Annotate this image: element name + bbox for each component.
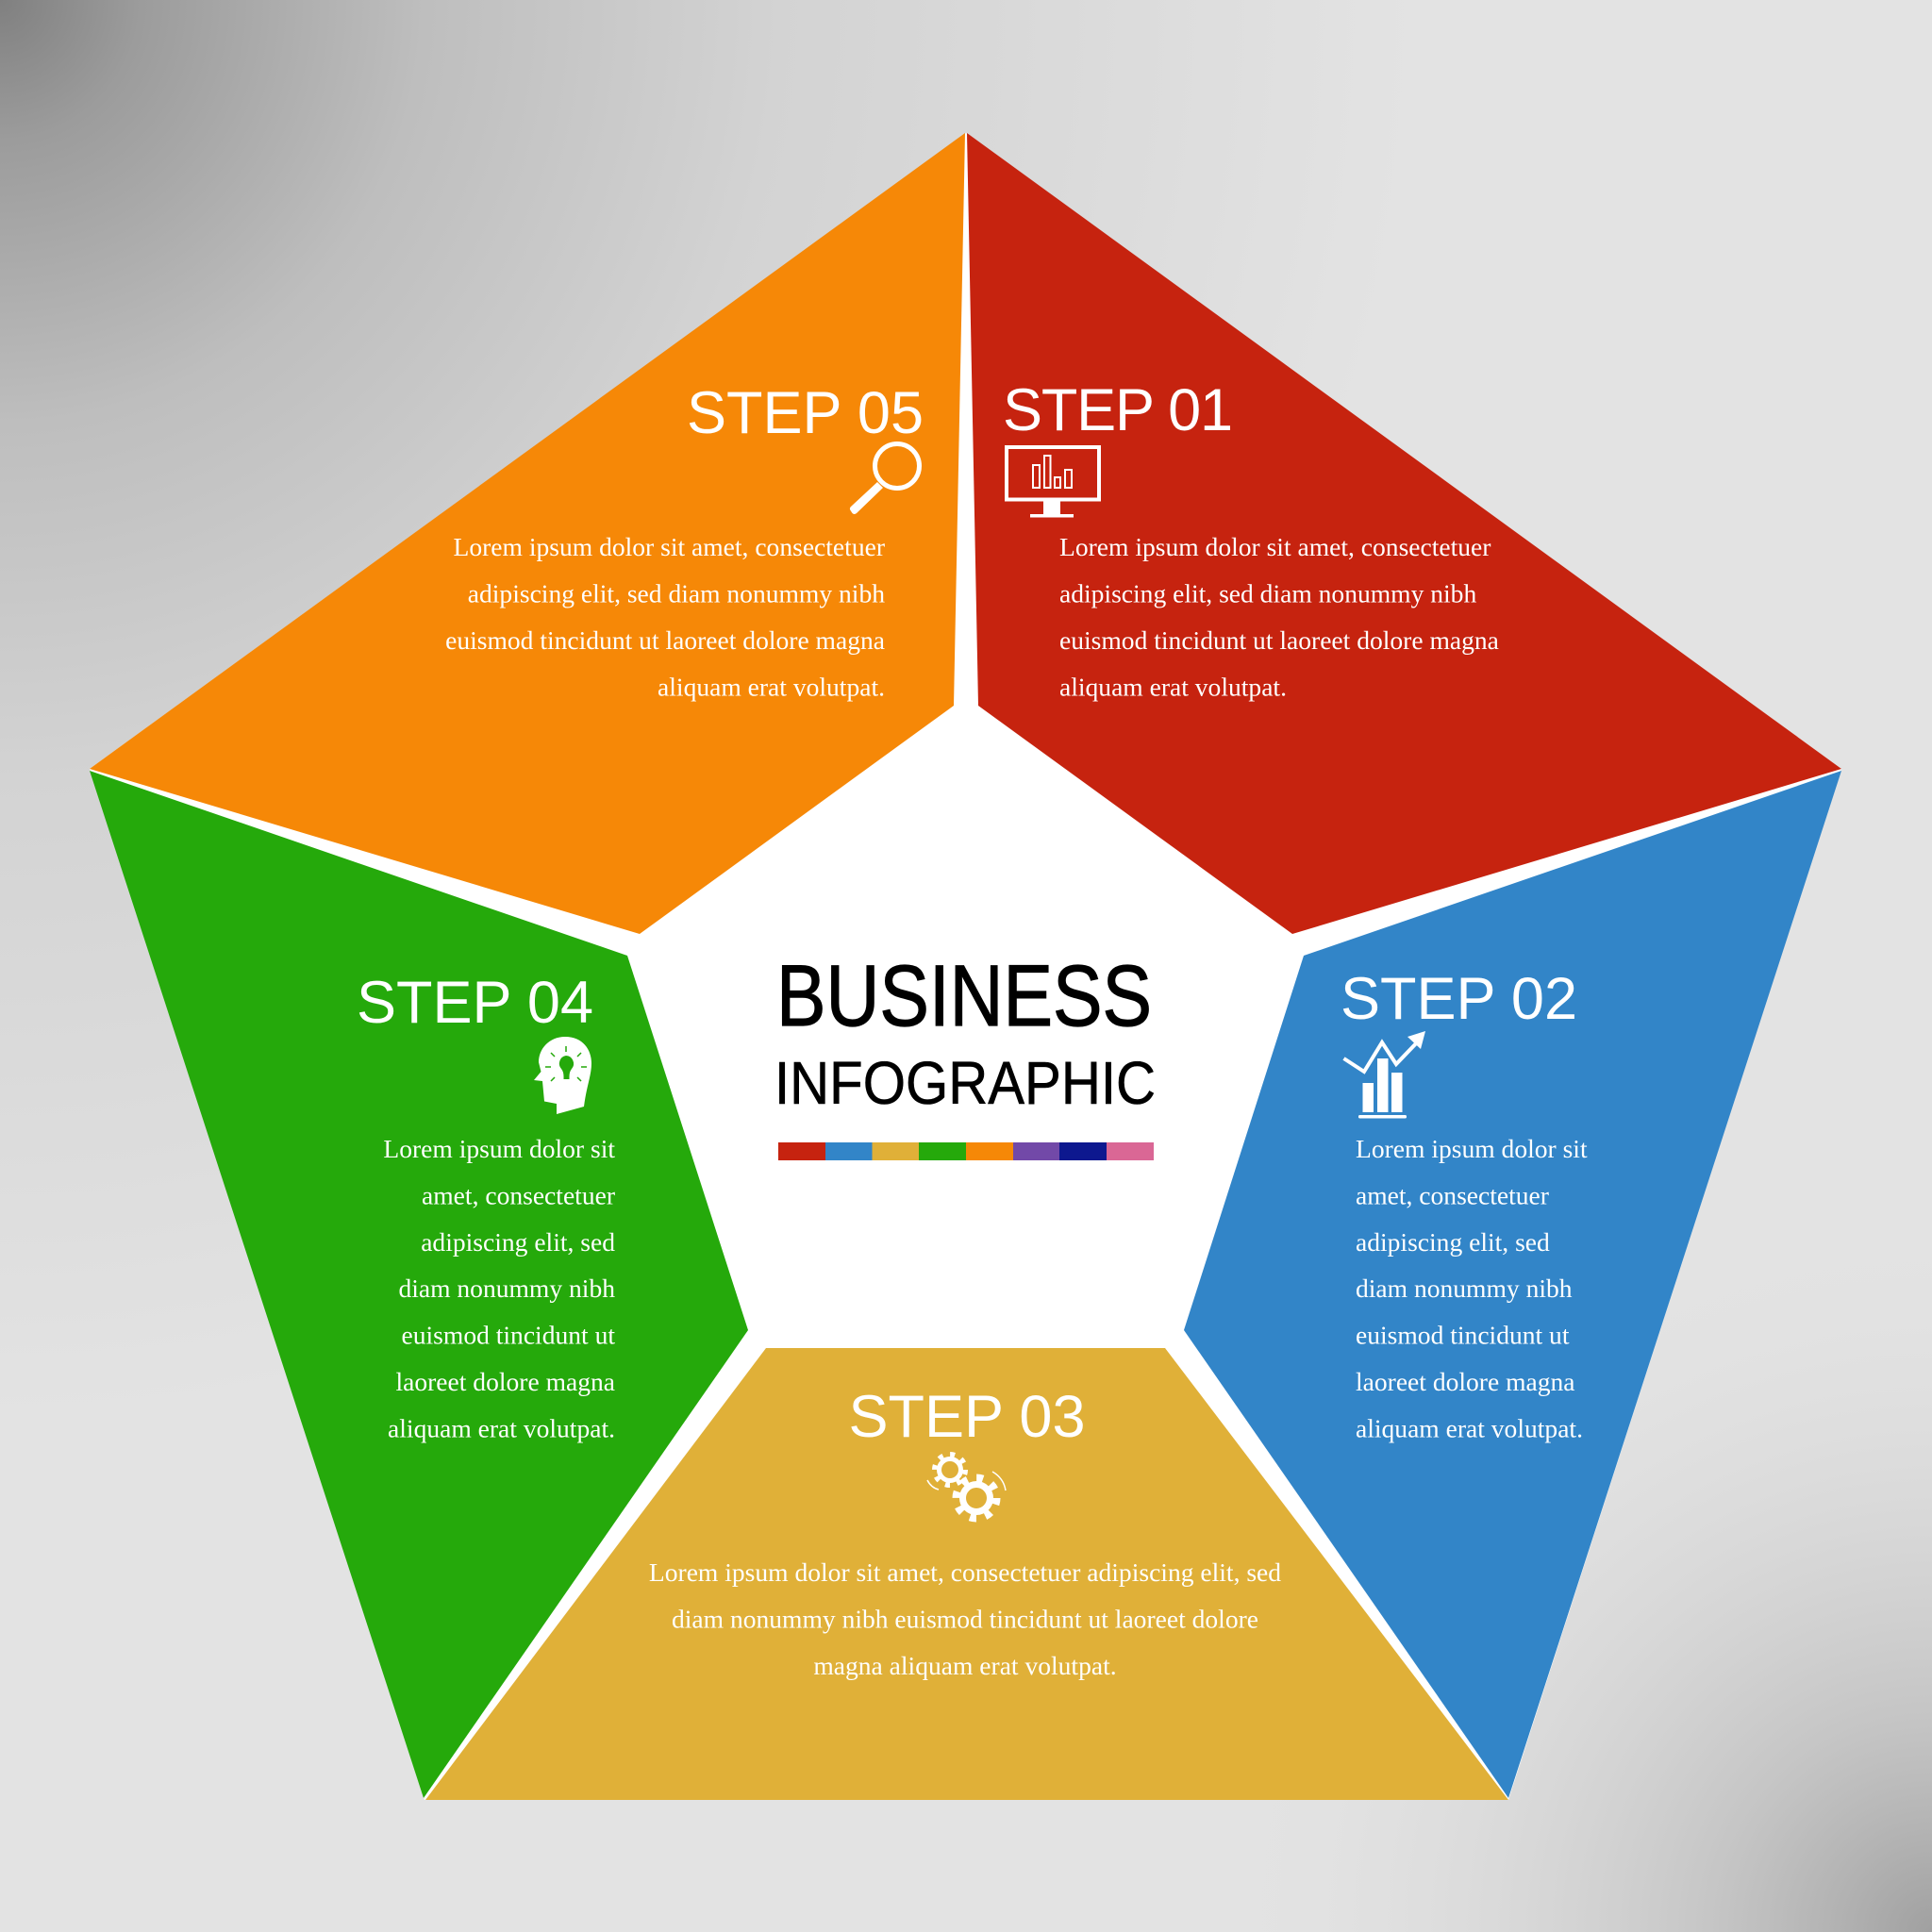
body text: step 01: Lorem ipsum dolor sit amet, consectetuer <box>1059 532 1491 561</box>
body text: step 02: Lorem ipsum dolor sit <box>1356 1134 1588 1163</box>
body text: step 02: euismod tincidunt ut <box>1356 1321 1570 1349</box>
icon: head with light bulb <box>534 1037 591 1114</box>
icon: magnifying glass <box>850 443 919 514</box>
body text: step 04: amet, consectetuer <box>422 1181 615 1209</box>
body text: step 03: Lorem ipsum dolor sit amet, consectetuer adipiscing elit, sed <box>649 1557 1281 1587</box>
green segment <box>90 771 748 1798</box>
body text: step 02: laoreet dolore magna <box>1356 1367 1575 1396</box>
body text: step 02: aliquam erat volutpat. <box>1356 1413 1583 1443</box>
panel: step 05 <box>90 133 965 934</box>
body text: step 02 <box>1356 1134 1588 1443</box>
panel: step 03 <box>425 1348 1508 1800</box>
body text: step 01 <box>1059 532 1499 702</box>
heading: step 02: STEP 02 <box>1341 966 1577 1032</box>
body text: step 04: euismod tincidunt ut <box>402 1321 615 1349</box>
orange segment <box>90 133 965 934</box>
body text: step 05: aliquam erat volutpat. <box>658 672 885 702</box>
blue segment <box>1184 771 1841 1798</box>
body text: step 02: adipiscing elit, sed <box>1356 1227 1550 1257</box>
body text: step 05 <box>445 532 885 702</box>
body text: step 05: adipiscing elit, sed diam nonummy nibh <box>468 579 885 608</box>
icon: gears <box>927 1455 1006 1519</box>
icon: growth chart <box>1343 1031 1425 1119</box>
body text: step 03 <box>649 1557 1281 1680</box>
body text: step 03: diam nonummy nibh euismod tincidunt ut laoreet dolore <box>672 1604 1258 1634</box>
body text: step 02: amet, consectetuer <box>1356 1181 1549 1209</box>
yellow segment <box>425 1348 1508 1800</box>
title: business: BUSINESS <box>776 948 1152 1044</box>
panel: step 04 <box>90 771 748 1798</box>
center title <box>774 948 1156 1160</box>
heading: step 03: STEP 03 <box>849 1384 1085 1450</box>
body text: step 05: Lorem ipsum dolor sit amet, consectetuer <box>454 532 885 561</box>
white pentagon base <box>90 133 1841 1800</box>
panel: step 01 <box>967 133 1841 934</box>
heading: step 04: STEP 04 <box>357 970 593 1036</box>
body text: step 04: adipiscing elit, sed <box>421 1227 615 1257</box>
heading: step 05: STEP 05 <box>687 380 924 446</box>
body text: step 04: aliquam erat volutpat. <box>388 1413 615 1443</box>
body text: step 04: laoreet dolore magna <box>395 1367 615 1396</box>
body text: step 04: Lorem ipsum dolor sit <box>383 1134 615 1163</box>
color bar <box>778 1142 1154 1160</box>
panel: step 02 <box>1184 771 1841 1798</box>
body text: step 05: euismod tincidunt ut laoreet dolore magna <box>445 625 885 655</box>
red segment <box>967 133 1841 934</box>
icon: monitor with bar chart <box>1007 447 1099 517</box>
body text: step 04: diam nonummy nibh <box>398 1274 615 1303</box>
body text: step 02: diam nonummy nibh <box>1356 1274 1573 1303</box>
body text: step 01: adipiscing elit, sed diam nonummy nibh <box>1059 579 1476 608</box>
subtitle: infographic: INFOGRAPHIC <box>774 1049 1156 1117</box>
body text: step 04 <box>383 1134 615 1443</box>
body text: step 01: aliquam erat volutpat. <box>1059 672 1287 702</box>
body text: step 03: magna aliquam erat volutpat. <box>813 1651 1117 1680</box>
heading: step 01: STEP 01 <box>1003 377 1233 443</box>
body text: step 01: euismod tincidunt ut laoreet dolore magna <box>1059 625 1499 655</box>
